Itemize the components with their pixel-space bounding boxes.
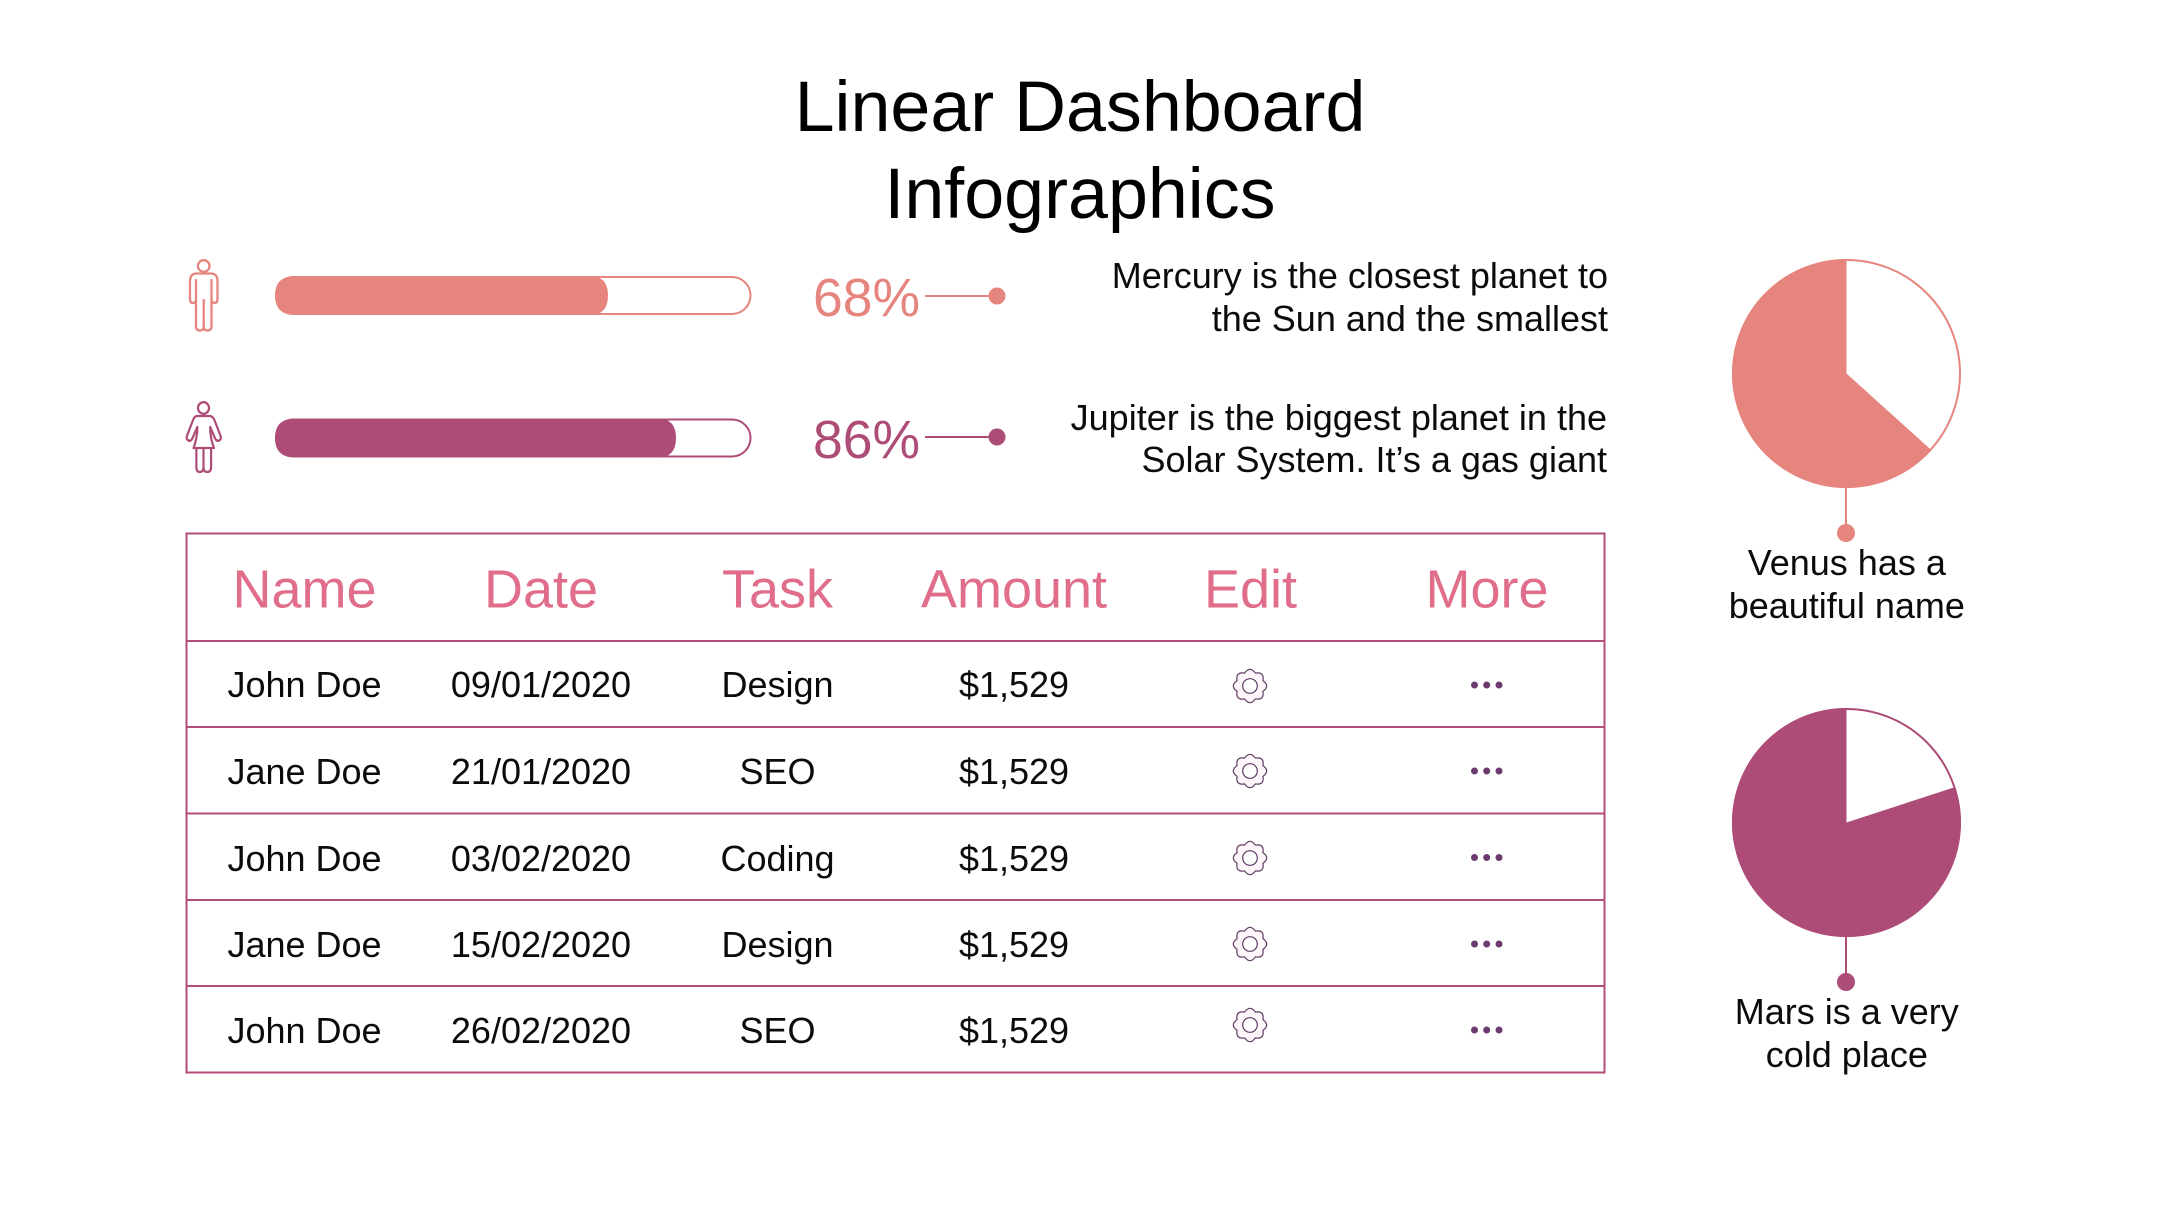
row 2: Jane Doe: [227, 751, 382, 792]
text: Venus: beautiful name: [1729, 585, 1965, 626]
row 2: $1,529: [959, 751, 1069, 792]
row 5: $1,529: [959, 1010, 1069, 1051]
row 4: Jane Doe: [227, 924, 382, 965]
connector: 68%: [925, 288, 1006, 304]
row 2: 21/01/2020: [451, 751, 631, 792]
text: Venus: [1729, 542, 1965, 626]
text: Jupiter: Solar System. It’s a gas giant: [1141, 439, 1607, 480]
row 1: Design: [721, 664, 834, 705]
text: Mercury: [1112, 255, 1608, 339]
row 1: [227, 664, 1502, 705]
table header: Edit: [1204, 560, 1297, 620]
row 1: 09/01/2020: [451, 664, 631, 705]
progress bar: 86%: [275, 418, 750, 458]
text: Mars: cold place: [1766, 1034, 1928, 1075]
text: Jupiter: [1071, 397, 1607, 480]
connector: Venus: [1837, 488, 1855, 542]
row 2: [227, 751, 1502, 792]
row 4: Design: [721, 924, 834, 965]
row 3: John Doe: [227, 838, 382, 879]
pie chart: Venus: [1732, 259, 1960, 488]
pie chart: Mars: [1732, 708, 1961, 937]
row 5: John Doe: [227, 1010, 382, 1051]
row 5: SEO: [739, 1010, 816, 1051]
table header: Name: [232, 560, 377, 620]
row 3: Coding: [720, 838, 835, 879]
connector: 86%: [925, 428, 1006, 446]
percentage: 86%: 86%: [813, 411, 920, 470]
row 5: [227, 1008, 1502, 1051]
row 3: 03/02/2020: [451, 838, 631, 879]
row 4: 15/02/2020: [451, 924, 631, 965]
table header: Task: [722, 560, 834, 620]
row 1: John Doe: [227, 664, 382, 705]
row 5: 26/02/2020: [451, 1010, 631, 1051]
text: Venus: Venus has a: [1748, 542, 1947, 583]
row 3: $1,529: [959, 838, 1069, 879]
row 1: $1,529: [959, 664, 1069, 705]
text: Mercury: the Sun and the smallest: [1212, 298, 1608, 339]
row 4: [227, 924, 1502, 965]
text: Mars: Mars is a very: [1735, 991, 1959, 1032]
percentage: 68%: 68%: [813, 269, 920, 328]
text: Mercury: Mercury is the closest planet to: [1112, 255, 1608, 296]
table header: Amount: [921, 560, 1107, 620]
table header: More: [1425, 560, 1549, 620]
table header: [232, 560, 1549, 620]
title: Infographics: [884, 154, 1276, 234]
table: [186, 534, 1605, 1072]
table header: Date: [484, 560, 598, 620]
text: Mars: [1735, 991, 1959, 1075]
icon: woman: [187, 402, 221, 472]
icon: man: [190, 260, 218, 330]
table frame: [186, 534, 1605, 1072]
text: Jupiter: Jupiter is the biggest planet in the: [1071, 397, 1607, 438]
title: Linear Dashboard: [795, 67, 1365, 147]
row 3: [227, 838, 1502, 879]
row 2: SEO: [739, 751, 816, 792]
row 4: $1,529: [959, 924, 1069, 965]
connector: Mars: [1837, 937, 1855, 991]
progress bar: 68%: [275, 276, 750, 315]
title: [795, 67, 1365, 234]
